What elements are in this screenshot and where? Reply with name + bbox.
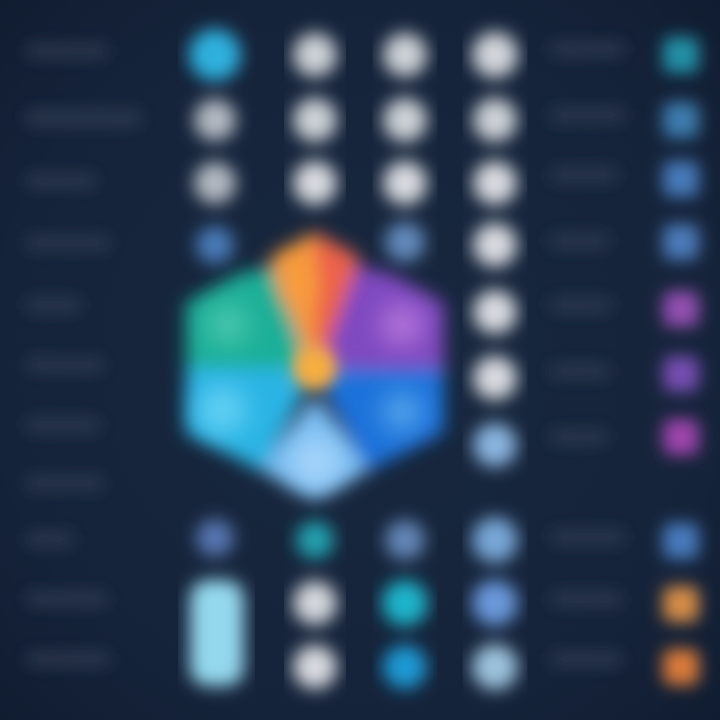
column 4 markers [472,32,518,690]
segment: top red accent [315,225,372,380]
column 1 markers [189,29,244,686]
segment: top orange [258,225,315,380]
column 3 markers [382,33,428,689]
hexagon wheel [160,225,470,510]
right swatches [663,37,699,685]
column 2 markers [293,33,337,689]
hexagon highlights [198,269,422,488]
hexagon centre [293,346,337,390]
right column labels [550,42,625,666]
segment: upper right purple [315,265,470,375]
segment: upper left green [160,265,315,375]
left column labels [26,44,141,666]
segment: lower right blue [314,356,458,482]
segment: bottom light blue [262,395,368,510]
segment: lower left cyan [172,354,317,482]
